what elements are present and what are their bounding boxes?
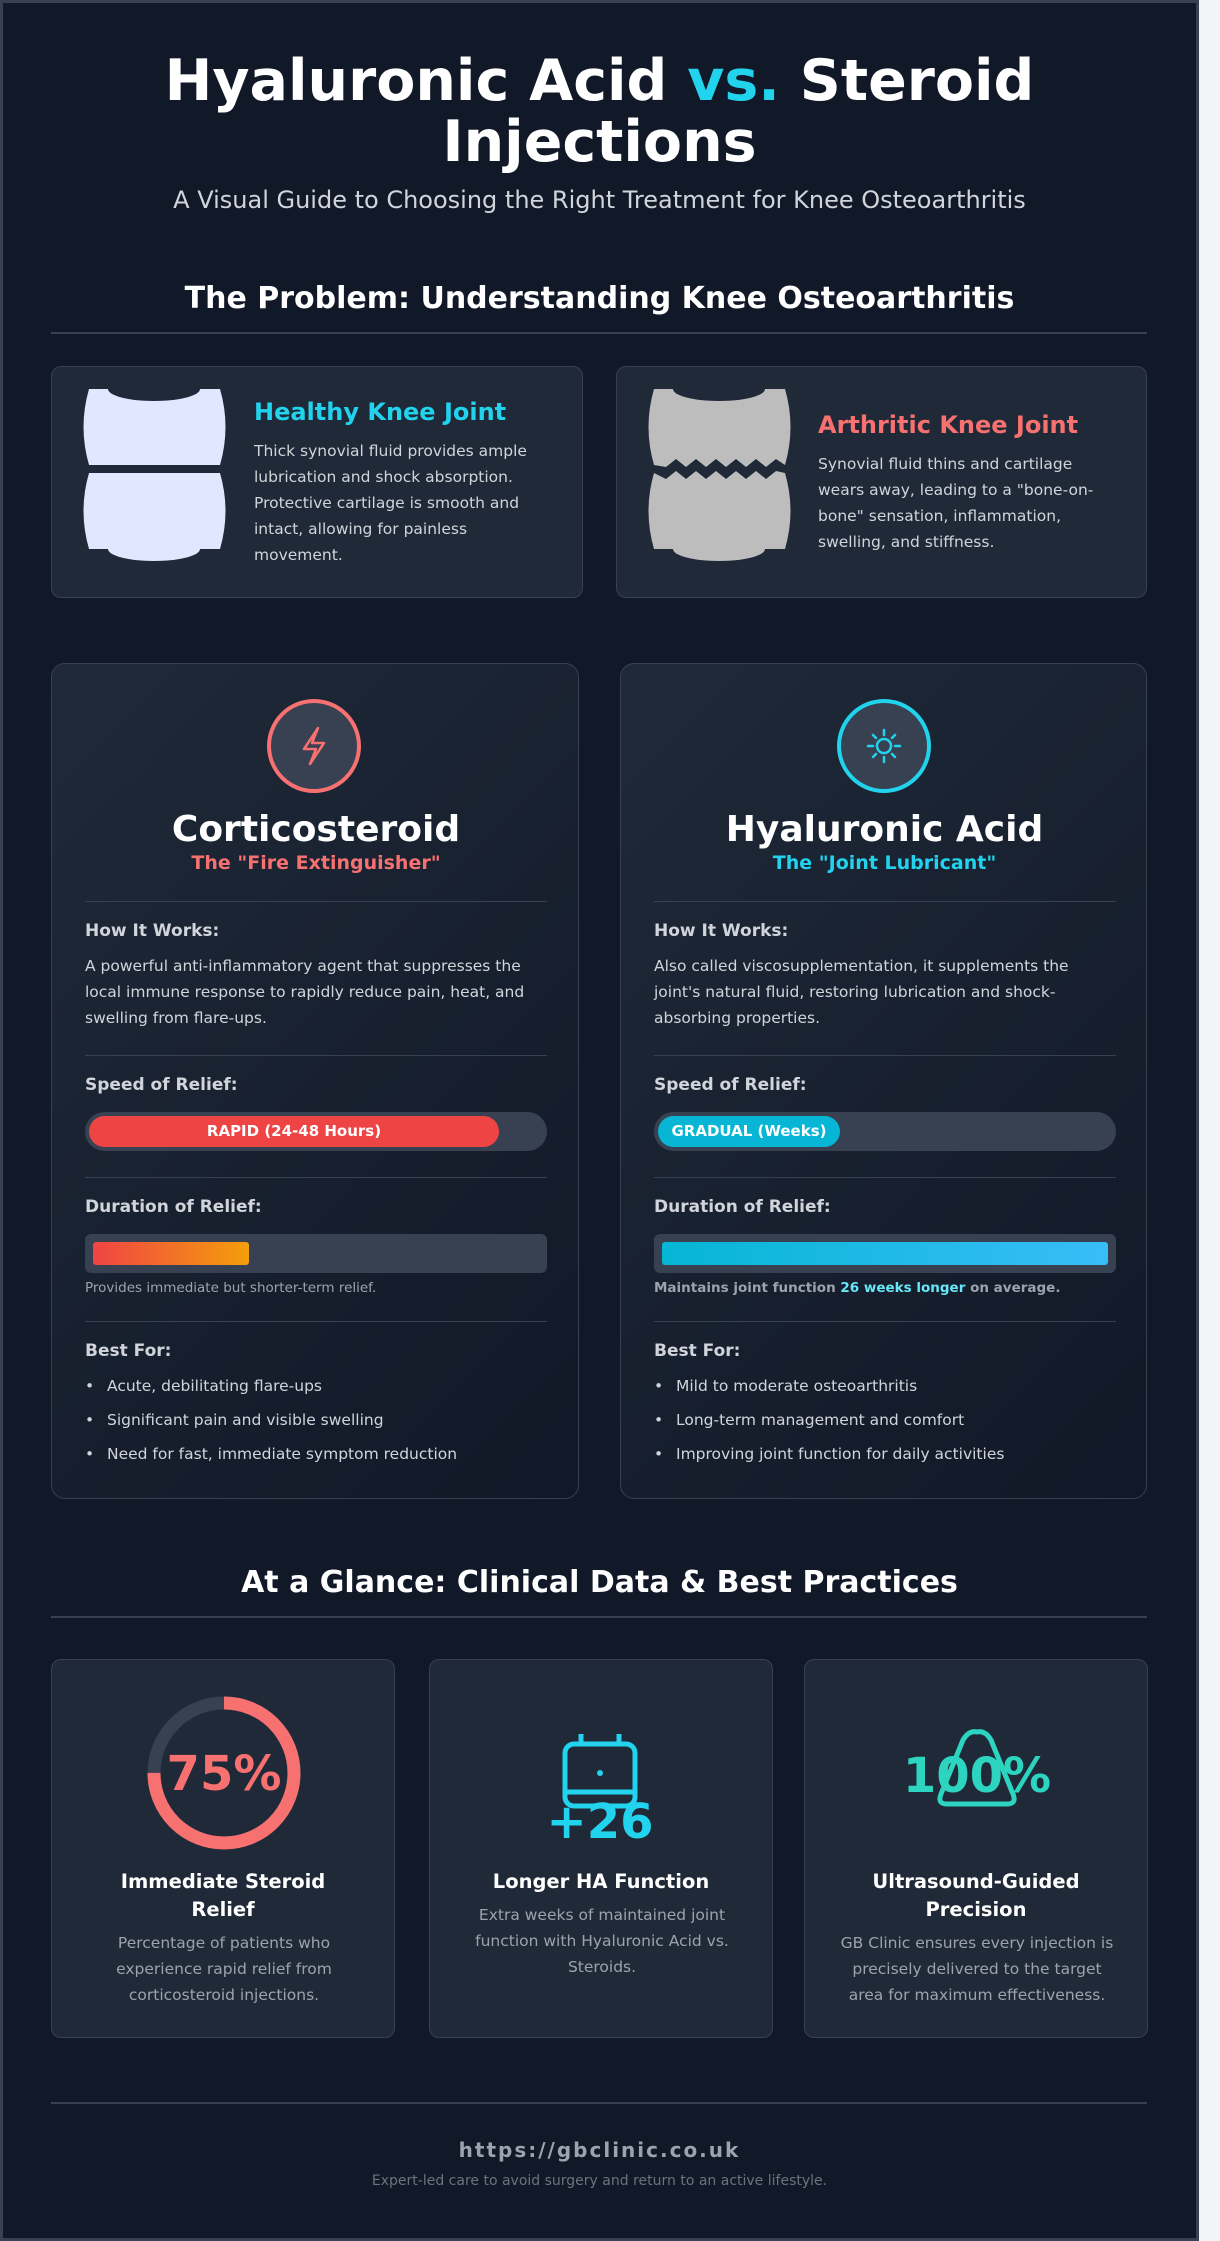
stat: 75%: Relief xyxy=(191,1898,255,1921)
text: arthritic: Synovial fluid thins and cartilage wears away, leading to a "bone-on-bone" sensation, inflammation, swelling, and stiffness. xyxy=(818,455,1093,551)
stat: 100%: GB Clinic ensures every injection is precisely delivered to the target area for maximum effectiveness. xyxy=(841,1934,1113,2004)
chart: donut 75%: 75% xyxy=(167,1746,281,1802)
panel: corticosteroid: Acute, debilitating flare-ups xyxy=(107,1377,322,1395)
panel: hyaluronic acid xyxy=(620,663,1147,1499)
panel: healthy knee xyxy=(51,366,583,598)
icon: lightning xyxy=(267,699,361,793)
text: healthy: Thick synovial fluid provides ample lubrication and shock absorption. Protective cartilage is smooth and intact, allowing for painless movement. xyxy=(254,442,527,564)
bar: speed: GRADUAL (Weeks) xyxy=(671,1122,826,1140)
stat: 75%: Immediate Steroid xyxy=(121,1870,325,1893)
panel: corticosteroid xyxy=(51,663,579,1499)
panel: hyaluronic acid: Mild to moderate osteoarthritis xyxy=(676,1377,917,1395)
panel: hyaluronic acid: Also called viscosupplementation, it supplements the joint's natural fluid, restoring lubrication and shock-absorbing properties. xyxy=(654,957,1069,1027)
title xyxy=(165,48,1034,175)
heading: at a glance: At a Glance: Clinical Data & Best Practices xyxy=(241,1565,958,1600)
footer: url: https://gbclinic.co.uk xyxy=(459,2138,740,2162)
chart: donut 75% xyxy=(148,1696,300,1850)
stat: 75% xyxy=(51,1659,395,2038)
bar: speed xyxy=(85,1112,547,1151)
bar: speed: RAPID (24-48 Hours) xyxy=(207,1122,381,1140)
heading: the problem: The Problem: Understanding Knee Osteoarthritis xyxy=(185,281,1014,316)
icon: sun xyxy=(837,699,931,793)
heading: arthritic: Arthritic Knee Joint xyxy=(818,411,1078,439)
heading: healthy: Healthy Knee Joint xyxy=(254,398,506,426)
panel: hyaluronic acid: Long-term management and comfort xyxy=(676,1411,964,1429)
icon: calendar with +26: +26 xyxy=(546,1794,654,1850)
subtitle: A Visual Guide to Choosing the Right Treatment for Knee Osteoarthritis xyxy=(173,186,1026,214)
stat: +26: Extra weeks of maintained joint function with Hyaluronic Acid vs. Steroids. xyxy=(475,1906,729,1976)
panel: hyaluronic acid: Improving joint function for daily activities xyxy=(676,1445,1004,1463)
icon: arthritic knee joint xyxy=(648,389,790,561)
subheading: The "Joint Lubricant" xyxy=(773,852,996,874)
bar: duration xyxy=(85,1234,547,1273)
speed of relief: Speed of Relief: xyxy=(85,1075,238,1095)
panel: corticosteroid: Provides immediate but shorter-term relief. xyxy=(85,1280,376,1296)
panel: corticosteroid: A powerful anti-inflammatory agent that suppresses the local immune response to rapidly reduce pain, heat, and swelling from flare-ups. xyxy=(85,957,524,1027)
bar: speed xyxy=(654,1112,1116,1151)
how it works: How It Works: xyxy=(654,921,788,941)
speed of relief: Speed of Relief: xyxy=(654,1075,807,1095)
stat: +26 xyxy=(429,1659,773,2038)
stat: 75%: Percentage of patients who experience rapid relief from corticosteroid injections. xyxy=(116,1934,332,2004)
footer: tagline: Expert-led care to avoid surgery and return to an active lifestyle. xyxy=(372,2173,827,2189)
icon: calendar with +26 xyxy=(546,1734,654,1850)
best for: Best For: xyxy=(654,1341,740,1361)
panel: hyaluronic acid: Maintains joint function 26 weeks longer on average. xyxy=(654,1280,1060,1296)
heading: Corticosteroid xyxy=(172,809,460,850)
icon: healthy knee joint xyxy=(84,389,226,561)
panel: corticosteroid: Need for fast, immediate symptom reduction xyxy=(107,1445,457,1463)
duration of relief: Duration of Relief: xyxy=(85,1197,262,1217)
how it works: How It Works: xyxy=(85,921,219,941)
duration of relief: Duration of Relief: xyxy=(654,1197,831,1217)
panel: corticosteroid: Significant pain and visible swelling xyxy=(107,1411,384,1429)
stat: 100%: Precision xyxy=(926,1898,1026,1921)
heading: Hyaluronic Acid xyxy=(726,809,1043,850)
bar: duration xyxy=(654,1234,1116,1273)
icon: ultrasound triangle with 100%: 100% xyxy=(903,1748,1051,1804)
subheading: The "Fire Extinguisher" xyxy=(191,852,441,874)
best for: Best For: xyxy=(85,1341,171,1361)
stat: 100%: Ultrasound-Guided xyxy=(872,1870,1080,1893)
stat: +26: Longer HA Function xyxy=(493,1870,709,1893)
title: Hyaluronic Acid vs. Steroid xyxy=(165,48,1034,114)
title: Injections xyxy=(442,109,757,175)
stat: 100% xyxy=(804,1659,1148,2038)
panel: arthritic knee xyxy=(616,366,1147,598)
